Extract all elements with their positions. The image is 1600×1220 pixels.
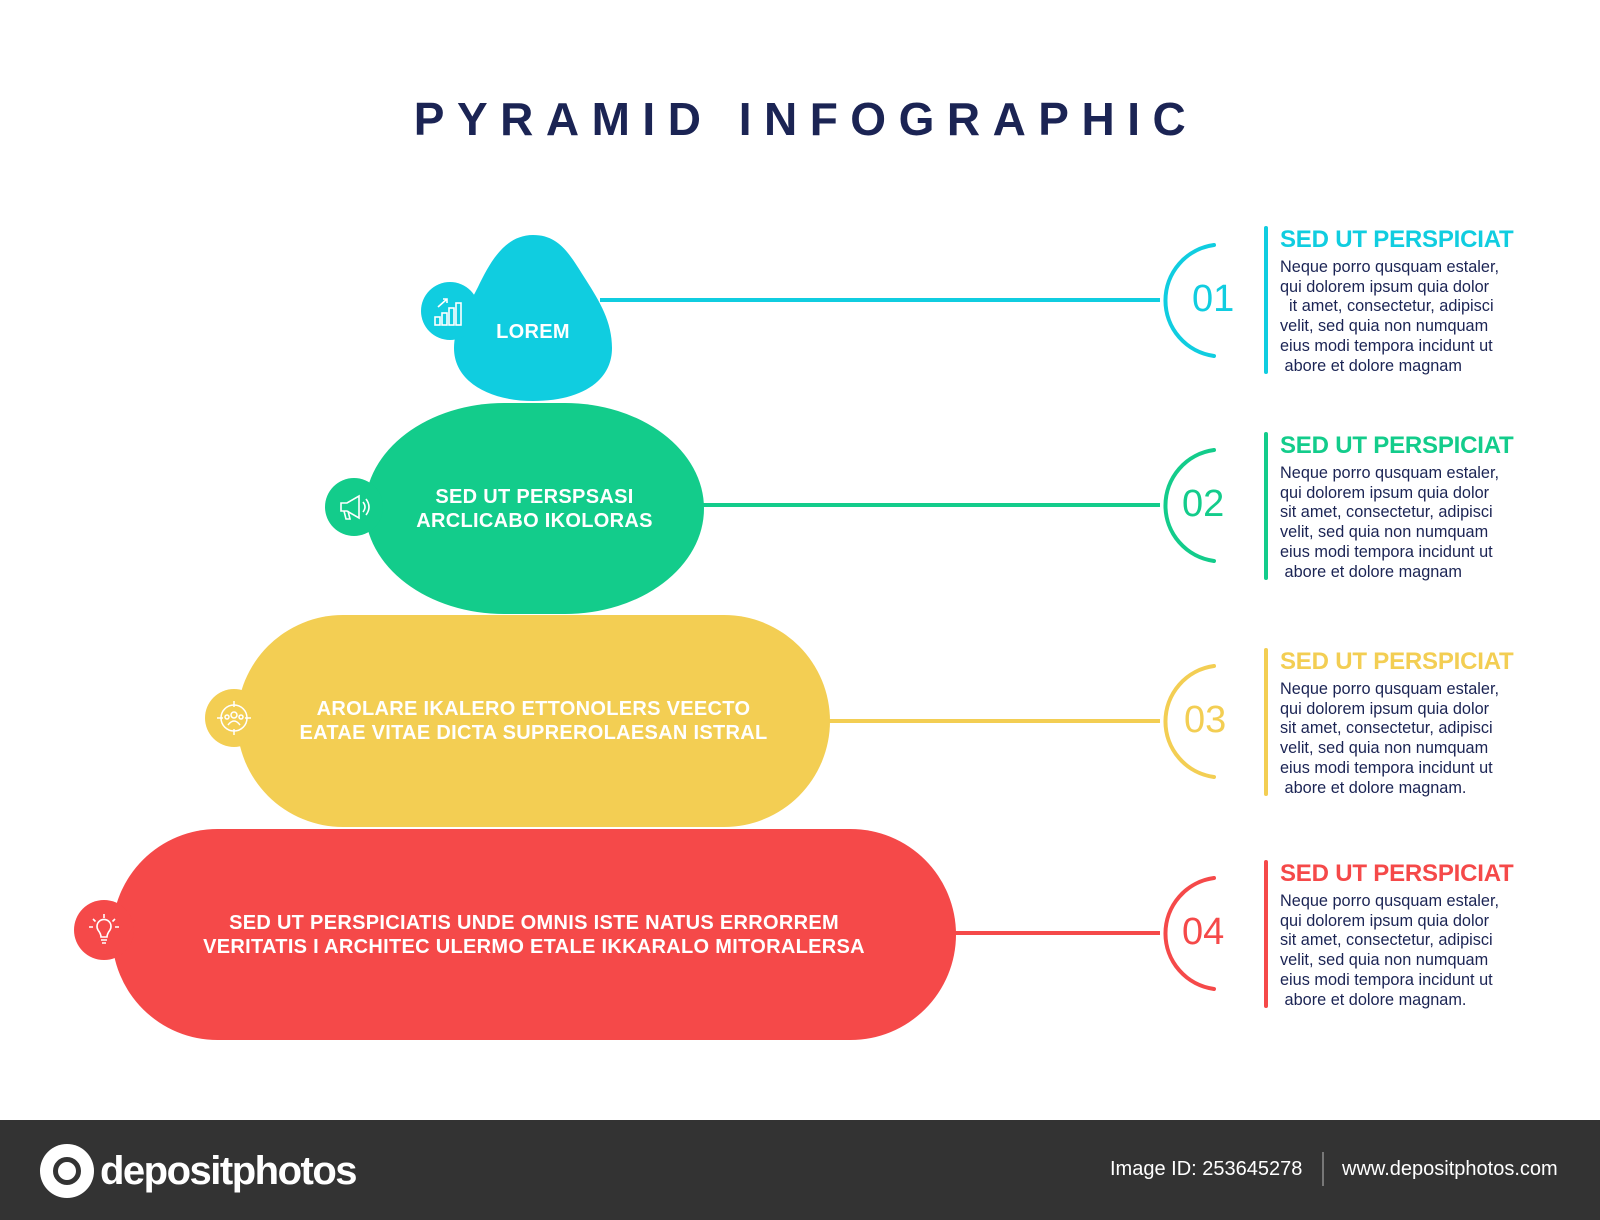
line 4 [950,931,1160,935]
text: 03 [1184,699,1226,741]
title: PYRAMID INFOGRAPHIC [414,93,1198,145]
text block 2 [1264,432,1514,581]
text block 3: Neque porro qusquam estaler, qui dolorem ipsum quia dolor sit amet, consectetur, adipisci velit, sed quia non numquam eius modi tempora incidunt ut abore et dolore magnam. [1280,680,1499,797]
pill: green [365,403,704,614]
text block 3 [1264,648,1514,797]
text block 4 [1264,860,1514,1009]
icon circle 3 [205,689,263,747]
text: 02 [1182,483,1224,525]
pill: yellow [237,615,830,827]
text: 04 [1182,911,1224,953]
text block 4: SED UT PERSPICIAT [1280,860,1514,887]
footer logo [40,1144,356,1198]
arc 1 [1165,245,1214,356]
text block 1: SED UT PERSPICIAT [1280,226,1514,253]
arc 4 [1165,878,1214,989]
icon circle 1 [421,282,479,340]
line 3 [826,719,1160,723]
text block 3: SED UT PERSPICIAT [1280,648,1514,675]
pill: red: SED UT PERSPICIATIS UNDE OMNIS ISTE NATUS ERRORREM [229,912,839,934]
footer bar: www.depositphotos.com [1342,1158,1558,1180]
label: lorem: LOREM [496,321,570,343]
pill: green: SED UT PERSPSASI [435,486,634,508]
icon circle 4 [74,900,134,960]
text block 1 [1264,226,1514,375]
text block 2: SED UT PERSPICIAT [1280,432,1514,459]
arc 2 [1165,450,1214,561]
text block 2: Neque porro qusquam estaler, qui dolorem ipsum quia dolor sit amet, consectetur, adipisci velit, sed quia non numquam eius modi tempora incidunt ut abore et dolore magnam [1280,464,1499,581]
icon circle 2 [325,478,383,536]
pill: red: VERITATIS I ARCHITEC ULERMO ETALE IKKARALO MITORALERSA [203,936,865,958]
text block 1: Neque porro qusquam estaler, qui dolorem ipsum quia dolor it amet, consectetur, adipisci velit, sed quia non numquam eius modi tempora incidunt ut abore et dolore magnam [1280,258,1499,375]
cyan teardrop [454,235,612,401]
footer image id: Image ID: 253645278 [1110,1158,1302,1180]
pill: green: ARCLICABO IKOLORAS [416,510,653,532]
pill: yellow: EATAE VITAE DICTA SUPREROLAESAN ISTRAL [299,722,768,744]
footer bar [0,1120,1600,1220]
line 2 [700,503,1160,507]
line 1 [600,298,1160,302]
pill: yellow: AROLARE IKALERO ETTONOLERS VEECTO [317,698,750,720]
numbers: 01 [1192,278,1234,320]
pill: red [112,829,956,1040]
arc 3 [1165,666,1214,777]
footer logo: depositphotos [100,1148,356,1192]
text block 4: Neque porro qusquam estaler, qui dolorem ipsum quia dolor sit amet, consectetur, adipisci velit, sed quia non numquam eius modi tempora incidunt ut abore et dolore magnam. [1280,892,1499,1009]
